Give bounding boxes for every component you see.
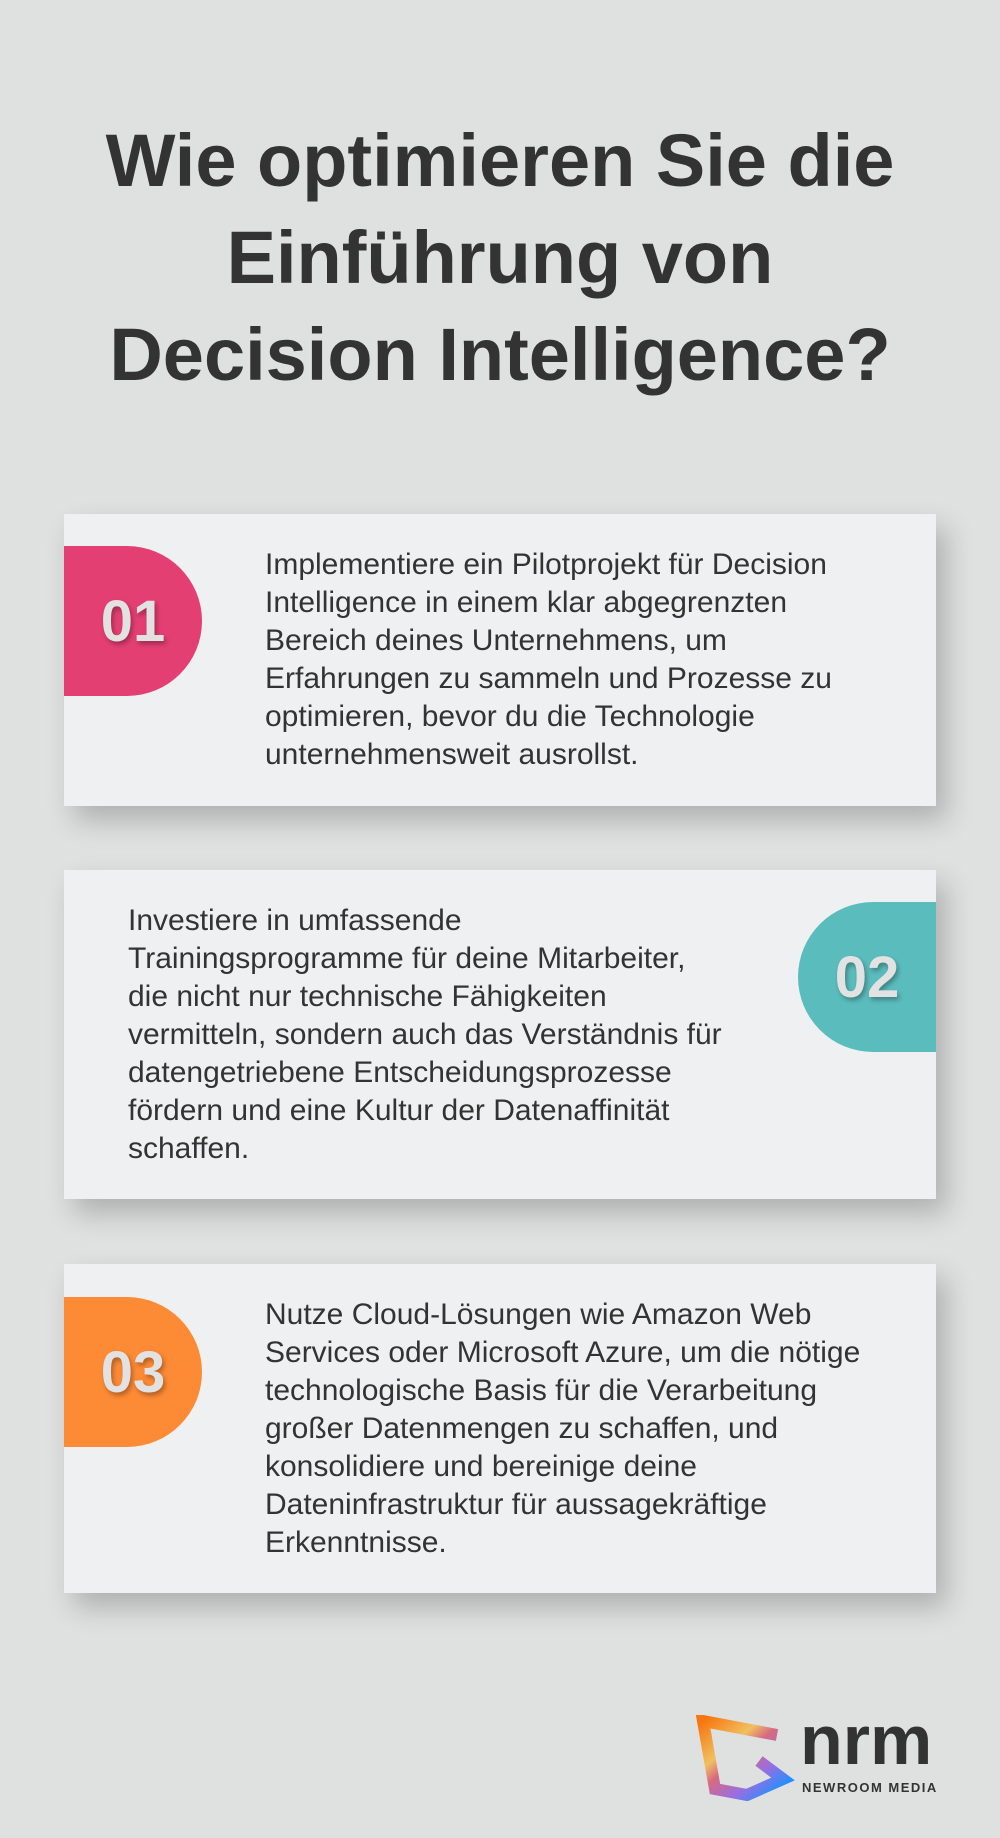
badge 02 — [798, 902, 936, 1052]
text 01: Bereich deines Unternehmens, um — [265, 624, 727, 657]
text 03 — [265, 1298, 860, 1559]
text 02: datengetriebene Entscheidungsprozesse — [128, 1056, 672, 1089]
panel: step 01 — [64, 514, 936, 806]
text 01: Implementiere ein Pilotprojekt für Decision — [265, 548, 827, 581]
text 02: die nicht nur technische Fähigkeiten — [128, 980, 607, 1013]
text 03: Services oder Microsoft Azure, um die nötige — [265, 1336, 860, 1369]
logo text: nrm — [800, 1701, 932, 1779]
logo: NEWROOM MEDIA — [802, 1780, 938, 1795]
text 01: optimieren, bevor du die Technologie — [265, 700, 755, 733]
title — [106, 119, 894, 396]
title: Einführung von — [227, 216, 773, 299]
panel: step 02 — [64, 870, 936, 1199]
text 03: konsolidiere und bereinige deine — [265, 1450, 697, 1483]
text 02 — [128, 904, 722, 1165]
title: Decision Intelligence? — [109, 313, 891, 396]
text 02: Trainingsprogramme für deine Mitarbeiter, — [128, 942, 685, 975]
badge 01 — [64, 546, 202, 696]
title: Wie optimieren Sie die — [106, 119, 894, 202]
text 03: großer Datenmengen zu schaffen, und — [265, 1412, 778, 1445]
badge 02: 02 — [835, 944, 899, 1010]
icon: nrm logo mark — [696, 1715, 795, 1801]
text 01: Intelligence in einem klar abgegrenzten — [265, 586, 787, 619]
text 01 — [265, 548, 832, 771]
text 02: vermitteln, sondern auch das Verständnis für — [128, 1018, 722, 1051]
logo — [696, 1701, 938, 1801]
text 01: unternehmensweit ausrollst. — [265, 738, 639, 771]
text 02: Investiere in umfassende — [128, 904, 462, 937]
badge 03 — [64, 1297, 202, 1447]
badge 03: 03 — [101, 1340, 165, 1404]
text 03: Nutze Cloud-Lösungen wie Amazon Web — [265, 1298, 811, 1331]
text 02: schaffen. — [128, 1132, 249, 1165]
badge 01: 01 — [101, 588, 165, 654]
panel: step 03 — [64, 1264, 936, 1593]
text 02: fördern und eine Kultur der Datenaffinität — [128, 1094, 669, 1127]
text 03: Erkenntnisse. — [265, 1526, 447, 1559]
text 03: technologische Basis für die Verarbeitung — [265, 1374, 817, 1407]
text 03: Dateninfrastruktur für aussagekräftige — [265, 1488, 767, 1521]
text 01: Erfahrungen zu sammeln und Prozesse zu — [265, 662, 832, 695]
